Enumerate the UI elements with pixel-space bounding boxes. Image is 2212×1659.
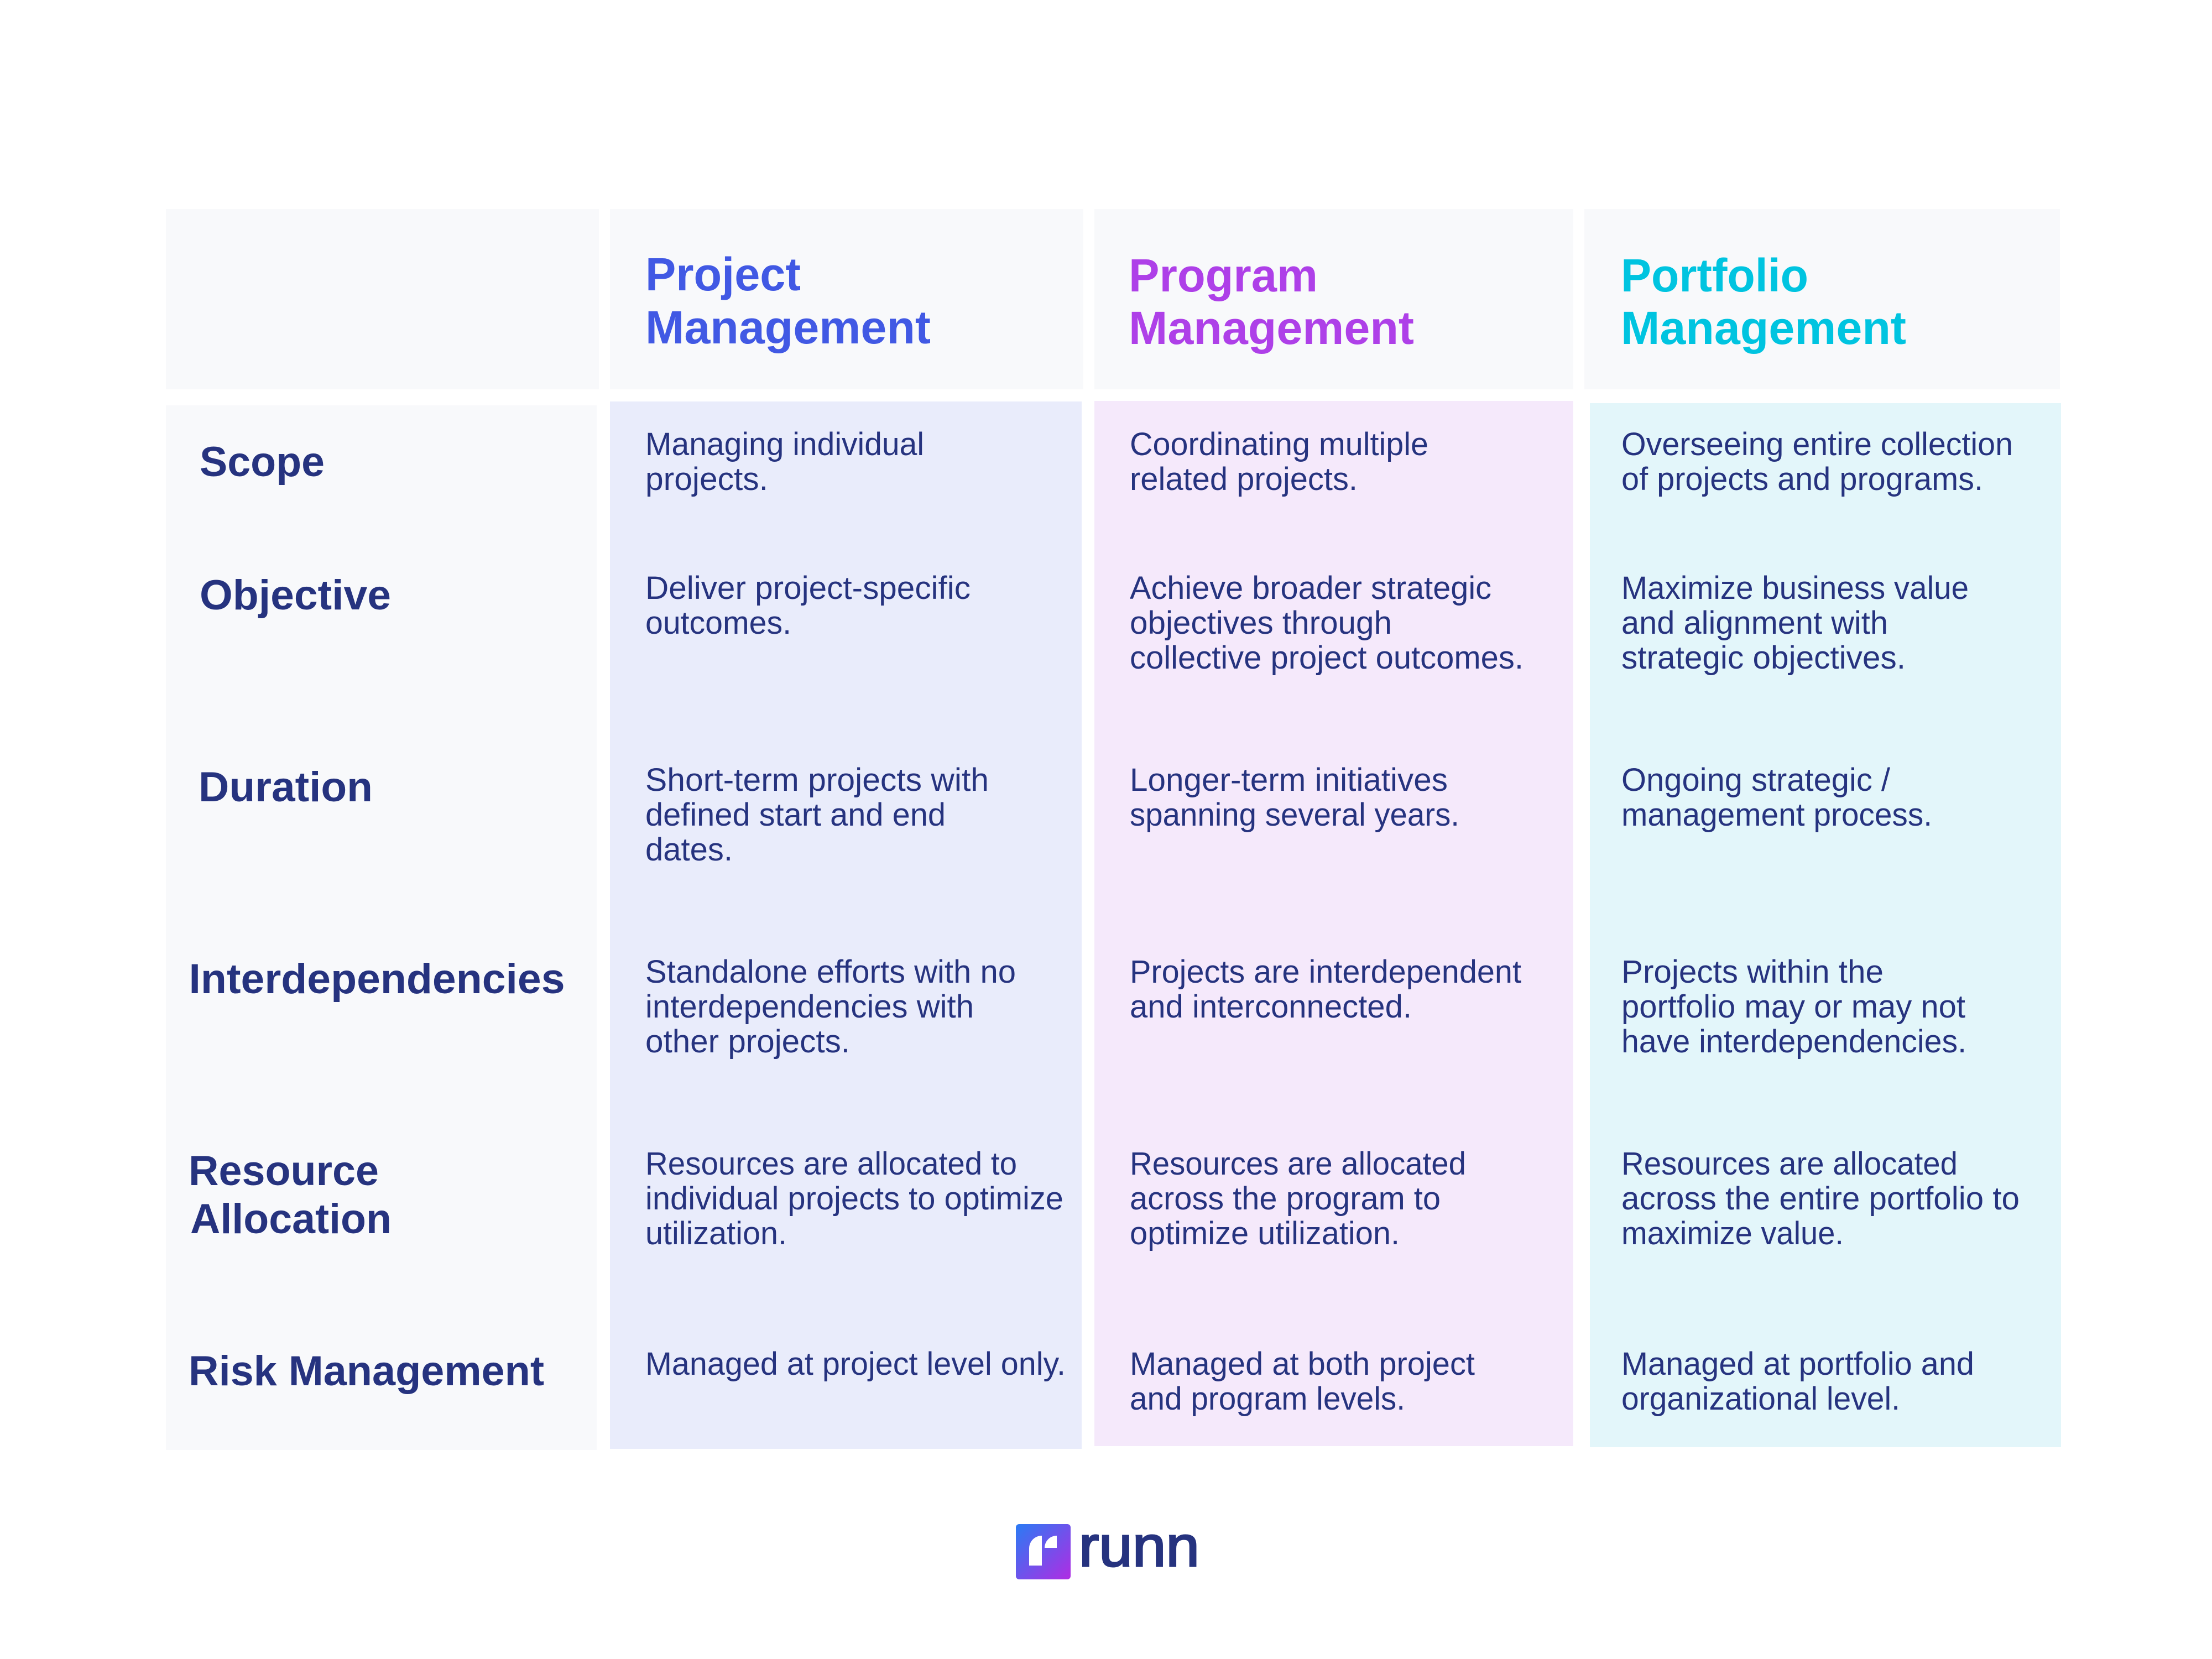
wordmark: runn: runn bbox=[1079, 1515, 1199, 1579]
icon: runn logo mark bbox=[1016, 1524, 1071, 1579]
panel: portfolio management header bbox=[1584, 209, 2060, 389]
panel: project management header bbox=[610, 209, 1083, 389]
text: portfolio objective: Maximize business value bbox=[1621, 570, 1969, 606]
text: program scope: Coordinating multiple bbox=[1130, 426, 1428, 462]
text: project scope: projects. bbox=[645, 461, 768, 497]
panel: empty top-left header cell bbox=[166, 209, 599, 389]
text: program objective: collective project outcomes. bbox=[1130, 640, 1524, 676]
text: portfolio interdependencies: Projects within the bbox=[1621, 954, 1884, 990]
text: project risk management: Managed at project level only. bbox=[645, 1346, 1066, 1382]
text: program objective: Achieve broader strategic bbox=[1130, 570, 1491, 606]
text: portfolio duration: Ongoing strategic / bbox=[1621, 762, 1891, 798]
logo: runn bbox=[1016, 1515, 1199, 1579]
text: project duration: Short-term projects with bbox=[645, 762, 989, 798]
text: portfolio objective: and alignment with bbox=[1621, 605, 1888, 641]
text: portfolio resource allocation: maximize value. bbox=[1621, 1215, 1844, 1251]
text: program interdependencies: and interconnected. bbox=[1130, 989, 1412, 1025]
label: resource allocation: Allocation bbox=[190, 1196, 392, 1243]
text: portfolio risk management: Managed at portfolio and bbox=[1621, 1346, 1974, 1382]
text: portfolio resource allocation: Resources are allocated bbox=[1621, 1146, 1958, 1182]
heading: project management: Project bbox=[645, 248, 801, 300]
text: program duration: spanning several years. bbox=[1130, 797, 1459, 833]
text: project duration: dates. bbox=[645, 832, 733, 868]
text: project resource allocation: Resources are allocated to bbox=[645, 1146, 1017, 1182]
text: program resource allocation: Resources are allocated bbox=[1130, 1146, 1466, 1182]
text: program risk management: and program levels. bbox=[1130, 1381, 1405, 1417]
text: portfolio objective: strategic objectives. bbox=[1621, 640, 1906, 676]
label: objective: Objective bbox=[200, 572, 391, 619]
text: program resource allocation: across the program to bbox=[1130, 1181, 1441, 1217]
panel: row labels bbox=[166, 405, 597, 1450]
text: project duration: defined start and end bbox=[645, 797, 946, 833]
text: program interdependencies: Projects are interdependent bbox=[1130, 954, 1521, 990]
text: portfolio risk management: organizational level. bbox=[1621, 1381, 1900, 1417]
text: portfolio scope: Overseeing entire collection bbox=[1621, 426, 2013, 462]
text: portfolio resource allocation: across the entire portfolio to bbox=[1621, 1181, 2020, 1217]
text: program risk management: Managed at both project bbox=[1130, 1346, 1475, 1382]
text: project objective: outcomes. bbox=[645, 605, 791, 641]
text: program scope: related projects. bbox=[1130, 461, 1358, 497]
panel: program management header bbox=[1094, 209, 1573, 389]
heading: program management: Program bbox=[1129, 249, 1318, 301]
text: program objective: objectives through bbox=[1130, 605, 1392, 641]
label: duration: Duration bbox=[199, 764, 373, 811]
label: resource allocation: Resource bbox=[189, 1147, 379, 1194]
heading: project management: Management bbox=[645, 301, 931, 353]
text: project interdependencies: interdependencies with bbox=[645, 989, 974, 1025]
heading: portfolio management: Management bbox=[1621, 302, 1906, 354]
heading: portfolio management: Portfolio bbox=[1621, 249, 1808, 301]
label: interdependencies: Interdependencies bbox=[189, 956, 565, 1003]
text: project interdependencies: Standalone efforts with no bbox=[645, 954, 1016, 990]
text: project interdependencies: other projects. bbox=[645, 1024, 850, 1060]
text: program duration: Longer-term initiatives bbox=[1130, 762, 1448, 798]
text: project resource allocation: utilization. bbox=[645, 1215, 787, 1251]
label: scope: Scope bbox=[200, 439, 325, 486]
text: portfolio scope: of projects and programs. bbox=[1621, 461, 1983, 497]
text: project resource allocation: individual projects to optimize bbox=[645, 1181, 1063, 1217]
text: portfolio interdependencies: portfolio may or may not bbox=[1621, 989, 1965, 1025]
text: portfolio interdependencies: have interdependencies. bbox=[1621, 1024, 1966, 1060]
text: project objective: Deliver project-specific bbox=[645, 570, 971, 606]
text: program resource allocation: optimize utilization. bbox=[1130, 1215, 1400, 1251]
label: risk management: Risk Management bbox=[189, 1348, 544, 1395]
heading: program management: Management bbox=[1129, 302, 1414, 354]
text: project scope: Managing individual bbox=[645, 426, 924, 462]
panel: project management column bbox=[610, 401, 1082, 1449]
panel: portfolio management column bbox=[1590, 403, 2061, 1447]
panel: program management column bbox=[1094, 401, 1573, 1446]
text: portfolio duration: management process. bbox=[1621, 797, 1932, 833]
